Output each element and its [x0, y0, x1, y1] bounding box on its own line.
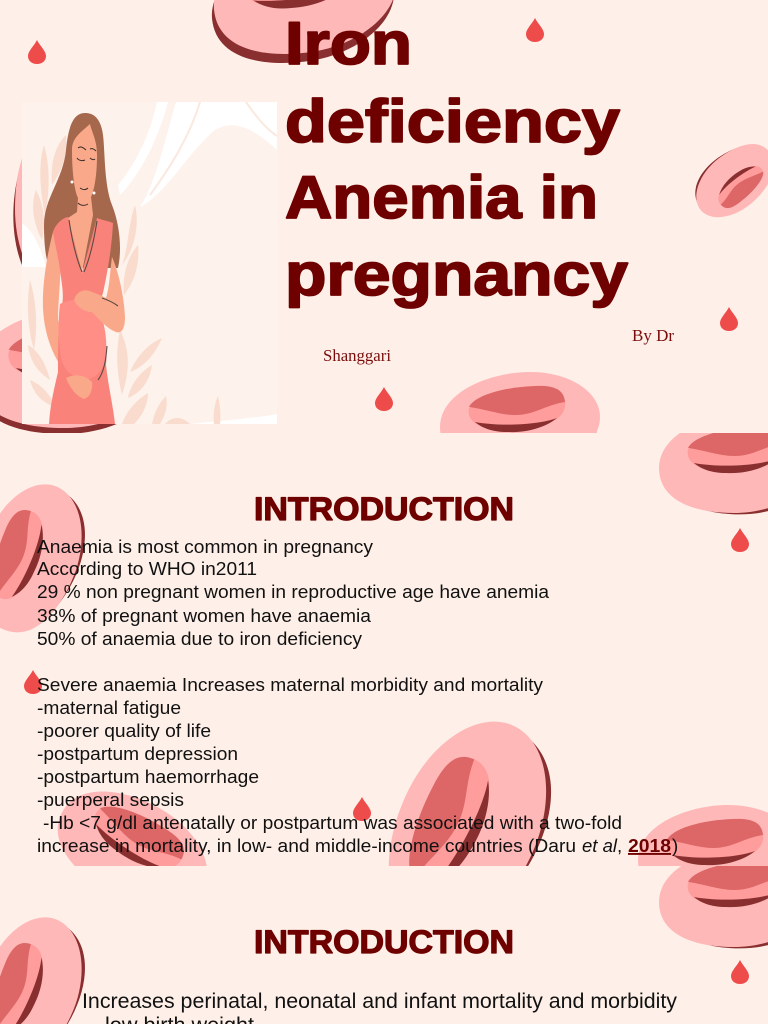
text block: anaemia facts: 50% of anaemia due to iron deficiency — [37, 628, 363, 649]
text block: anaemia facts: -poorer quality of life — [37, 720, 211, 741]
text block: anaemia facts: -postpartum haemorrhage — [37, 766, 259, 787]
heading: introduction repeated: INTRODUCTION — [254, 924, 514, 960]
title: pregnancy — [285, 241, 629, 308]
blood drops: second slide — [24, 528, 749, 821]
red blood cells: second slide — [0, 433, 768, 866]
text block: anaemia facts: -maternal fatigue — [37, 697, 181, 718]
text block: anaemia facts: et al — [582, 835, 618, 856]
blood drops: title slide — [28, 18, 738, 411]
text block: perinatal outcomes — [82, 990, 677, 1024]
author byline — [323, 326, 675, 365]
author byline: Shanggari — [323, 346, 391, 365]
text block: anaemia facts: -Hb <7 g/dl antenatally or postpartum was associated with a two-fold — [43, 812, 622, 833]
title: Iron — [285, 10, 412, 77]
text block: anaemia facts: , — [617, 835, 622, 856]
text block: anaemia facts: ) — [672, 835, 678, 856]
text block: anaemia facts: -puerperal sepsis — [37, 789, 184, 810]
text block: anaemia facts: 2018 — [628, 835, 671, 856]
title — [285, 10, 629, 308]
text block: anaemia facts: 38% of pregnant women have anaemia — [37, 605, 372, 626]
text block: perinatal outcomes: Increases perinatal, neonatal and infant mortality and morbidity — [82, 990, 677, 1013]
text block: anaemia facts — [37, 536, 678, 856]
text block: anaemia facts: 29 % non pregnant women in reproductive age have anemia — [37, 581, 550, 602]
text block: anaemia facts: increase in mortality, in low- and middle-income countries (Daru — [37, 835, 576, 856]
panel: introduction slide one — [0, 433, 768, 866]
red blood cells: title slide — [0, 0, 768, 473]
illustration: pregnant woman — [22, 102, 277, 424]
heading: introduction: INTRODUCTION — [254, 491, 514, 527]
text block: anaemia facts: Anaemia is most common in pregnancy — [37, 536, 374, 557]
title: Anemia in — [285, 164, 598, 231]
red blood cells: third slide — [0, 866, 768, 1024]
author byline: By Dr — [632, 326, 675, 345]
panel: title slide — [0, 0, 768, 473]
text block: anaemia facts: -postpartum depression — [37, 743, 238, 764]
text block: anaemia facts: According to WHO in2011 — [37, 558, 257, 579]
blood drop: third slide — [731, 960, 749, 984]
panel: introduction slide two — [0, 866, 768, 1024]
title: deficiency — [285, 88, 621, 155]
text block: anaemia facts: Severe anaemia Increases maternal morbidity and mortality — [37, 674, 544, 695]
